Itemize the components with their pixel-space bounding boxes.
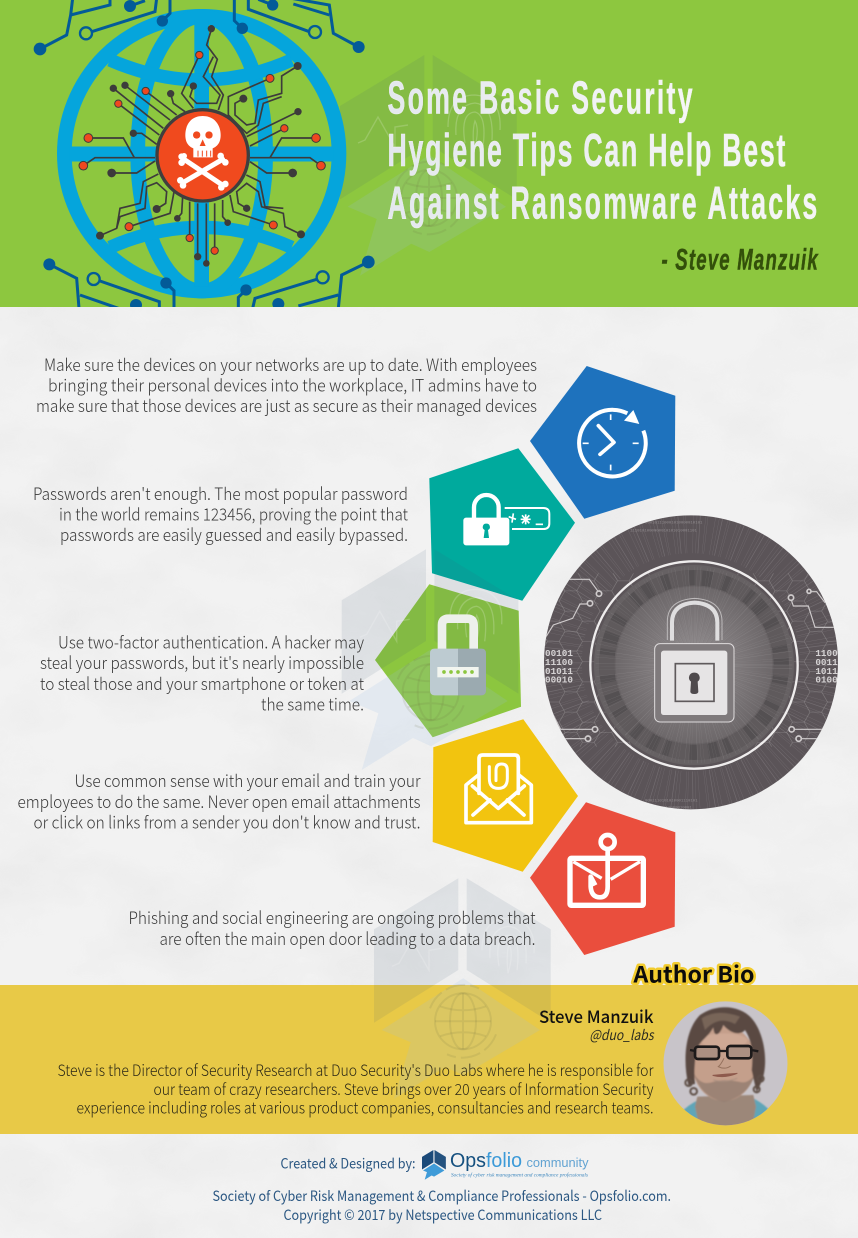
text: tip 5: Phishing and social engineering are ongoing problems that [128, 904, 536, 929]
text: tip 4 [18, 767, 421, 834]
icon: padlock with password [463, 495, 549, 545]
text: tip 4: or click on links from a sender you don't know and trust. [34, 808, 420, 834]
panel: lock disc: 000101110001010000010101 [645, 521, 703, 525]
binary digits: 00101 [545, 648, 573, 659]
text: tip 5: are often the main open door leading to a data breach. [160, 925, 536, 950]
panel: lock disc [543, 515, 840, 810]
text: author handle: @duo_labs [590, 1025, 655, 1045]
text: tip 1 [36, 351, 537, 417]
icon: clock with arrow [579, 410, 646, 476]
binary digits: 00010 [545, 675, 573, 686]
title: Some Basic Security [388, 72, 693, 123]
hexagon: blue [530, 366, 675, 519]
icon: envelope with attachment [466, 755, 531, 823]
text: tip 4: Use common sense with your email and train your [74, 767, 421, 792]
logo: Opsfolio community: community [526, 1156, 589, 1170]
globe grid [64, 16, 339, 291]
hexagon: teal [429, 448, 575, 601]
text: tip 1: bringing their personal devices into the workplace, IT admins have to [48, 372, 537, 396]
text: tip 2: in the world remains 123456, proving the point that [59, 500, 408, 526]
panel: green header [0, 0, 858, 311]
binary digits: 1011 [815, 666, 838, 677]
hexagon: green [375, 584, 521, 737]
icon: phishing hook and envelope [570, 835, 643, 905]
byline: - Steve Manzuik [662, 243, 819, 277]
binary digits: 11100 [545, 657, 573, 668]
logo: Opsfolio community: Opsfolio [450, 1150, 522, 1172]
text: author biography [58, 1059, 654, 1118]
text: created and designed by: Created & Designed by: [280, 1154, 416, 1174]
text: tip 3: the same time. [261, 690, 364, 716]
logo: Opsfolio community: Society of cyber risk management and compliance professionals [451, 1172, 588, 1178]
watermark: header cube [340, 55, 517, 276]
watermark: lower cube [374, 878, 551, 1099]
hexagon: yellow [433, 719, 578, 872]
icon: opsfolio cube [422, 1150, 446, 1180]
text: tip 3: to steal those and your smartphone or token at [40, 670, 364, 695]
binary digits: 01011 [545, 666, 573, 677]
text: tip 4: employees to do the same. Never open email attachments [18, 788, 421, 813]
hexagon: red [530, 802, 675, 955]
text: tip 3: steal your passwords, but it's nearly impossible [40, 649, 364, 674]
title: Hygiene Tips Can Help Best [388, 124, 786, 176]
text: tip 2 [33, 480, 408, 546]
watermark: middle cube [342, 549, 518, 770]
panel: lock disc: 00011000010001 [658, 806, 692, 810]
binary digits [546, 650, 838, 682]
text: tip 2: Passwords aren't enough. The most popular password [33, 480, 408, 505]
text: author biography: our team of crazy researchers. Steve brings over 20 years of Information Security [154, 1078, 654, 1100]
icon: skull and crossbones [157, 110, 248, 201]
panel: lock disc: 1110101000000010101010001101 [630, 530, 698, 534]
globe with circuit skull [34, 0, 375, 311]
binary digits: 1100 [815, 648, 838, 659]
heading: author bio: Author Bio [632, 958, 754, 990]
text: tip 1: Make sure the devices on your networks are up to date. With employees [44, 351, 537, 376]
title [388, 72, 817, 228]
ring and hub [594, 565, 794, 765]
panel: lock disc: 0001110101010001110101 [645, 800, 698, 804]
text: author name: Steve Manzuik [539, 1003, 654, 1028]
hex mesh [543, 573, 840, 747]
logo: Opsfolio community [422, 1150, 589, 1180]
text: tip 2: passwords are easily guessed and easily bypassed. [60, 521, 408, 546]
photo: author portrait [663, 1001, 787, 1130]
text: tip 5 [128, 904, 536, 950]
binary digits: 0011 [815, 657, 838, 668]
text: author biography: experience including roles at various product companies, consultancies and research teams. [76, 1096, 654, 1118]
text: society line: Society of Cyber Risk Management & Compliance Professionals - Opsfolio.com. [212, 1186, 671, 1206]
yellow author band [0, 985, 858, 1134]
text: tip 1: make sure that those devices are just as secure as their managed devices [36, 392, 537, 417]
icon: padlock with pin [430, 619, 486, 695]
text: tip 3: Use two-factor authentication. A hacker may [58, 628, 365, 654]
dark circuit traces [83, 28, 321, 263]
text: author biography: Steve is the Director of Security Research at Duo Security's Duo Labs where he is responsible for [58, 1059, 654, 1081]
corner circuits [40, 0, 368, 308]
circuit traces [545, 579, 835, 739]
text: tip 3 [40, 628, 365, 716]
binary digits: 0100 [815, 675, 838, 686]
text: copyright: Copyright © 2017 by Netspective Communications LLC [284, 1205, 602, 1225]
padlock [667, 598, 722, 640]
title: Against Ransomware Attacks [388, 177, 817, 228]
